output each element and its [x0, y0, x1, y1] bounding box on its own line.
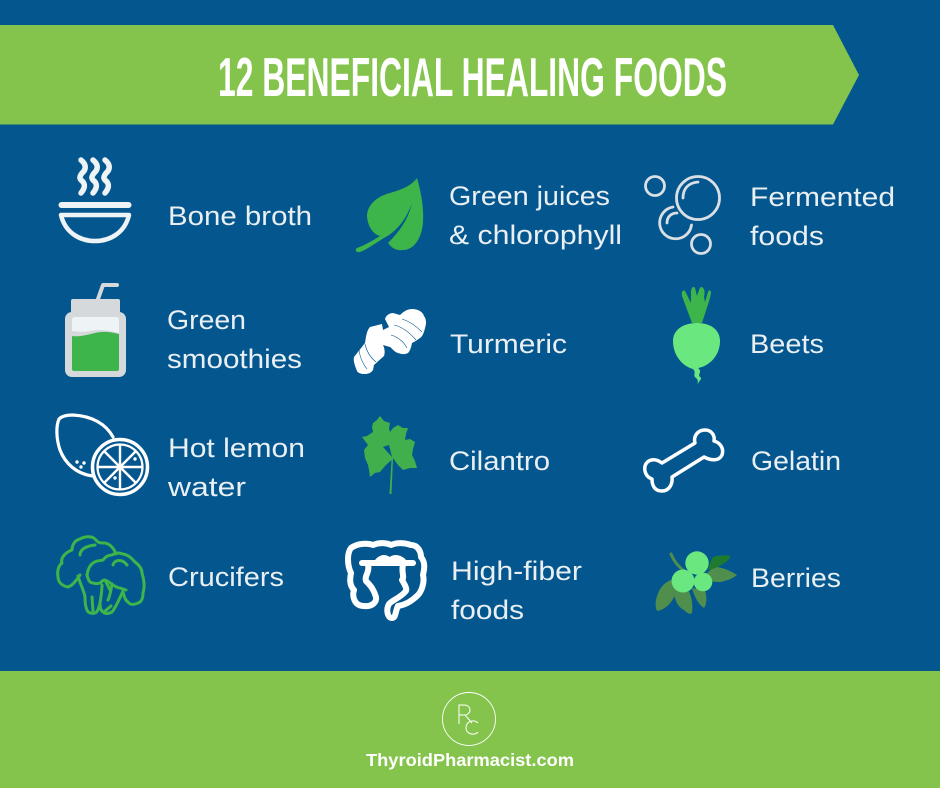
icon: green juice leaf: [356, 178, 423, 252]
label: turmeric: Turmeric: [450, 329, 567, 359]
label: berries: Berries: [751, 563, 841, 593]
icon: bone broth bowl: [61, 160, 129, 241]
icon: crucifers broccoli: [58, 537, 144, 614]
icon: turmeric root: [354, 309, 426, 374]
label: bone broth: Bone broth: [168, 201, 312, 231]
label: high-fiber foods: foods: [451, 595, 524, 625]
label: fermented foods: foods: [750, 221, 824, 251]
label: green juices and chlorophyll: [449, 181, 622, 250]
icon: cilantro: [362, 416, 417, 494]
label: cilantro: Cilantro: [449, 446, 550, 476]
icon: bone: [645, 430, 723, 491]
label: hot lemon water: [167, 433, 305, 502]
label: hot lemon water: water: [167, 472, 246, 502]
label: gelatin: Gelatin: [751, 446, 841, 476]
label: hot lemon water: Hot lemon: [168, 433, 305, 463]
label: beets: Beets: [750, 329, 824, 359]
title banner: [0, 25, 859, 124]
label: green smoothies: Green: [167, 305, 246, 335]
label: high-fiber foods: [451, 556, 582, 625]
icon: hot lemon water: [57, 415, 148, 494]
label: green juices and chlorophyll: Green juices: [449, 181, 610, 211]
label: green smoothies: smoothies: [167, 344, 302, 374]
label: crucifers: Crucifers: [168, 562, 284, 592]
footer band: [0, 671, 940, 788]
label: green smoothies: [167, 305, 302, 374]
label: fermented foods: Fermented: [750, 182, 895, 212]
website address: ThyroidPharmacist.com: [366, 750, 574, 770]
label: green juices and chlorophyll: & chlorophyll: [449, 220, 622, 250]
icon: high-fiber intestine: [348, 543, 424, 618]
label: fermented foods: [750, 182, 895, 251]
logo: RC monogram: [442, 692, 496, 746]
icon: berries: [656, 551, 737, 614]
icon: beet: [673, 287, 720, 384]
icon: green smoothie jar: [65, 285, 126, 377]
label: high-fiber foods: High-fiber: [451, 556, 582, 586]
icon: fermented bubbles: [646, 176, 720, 254]
